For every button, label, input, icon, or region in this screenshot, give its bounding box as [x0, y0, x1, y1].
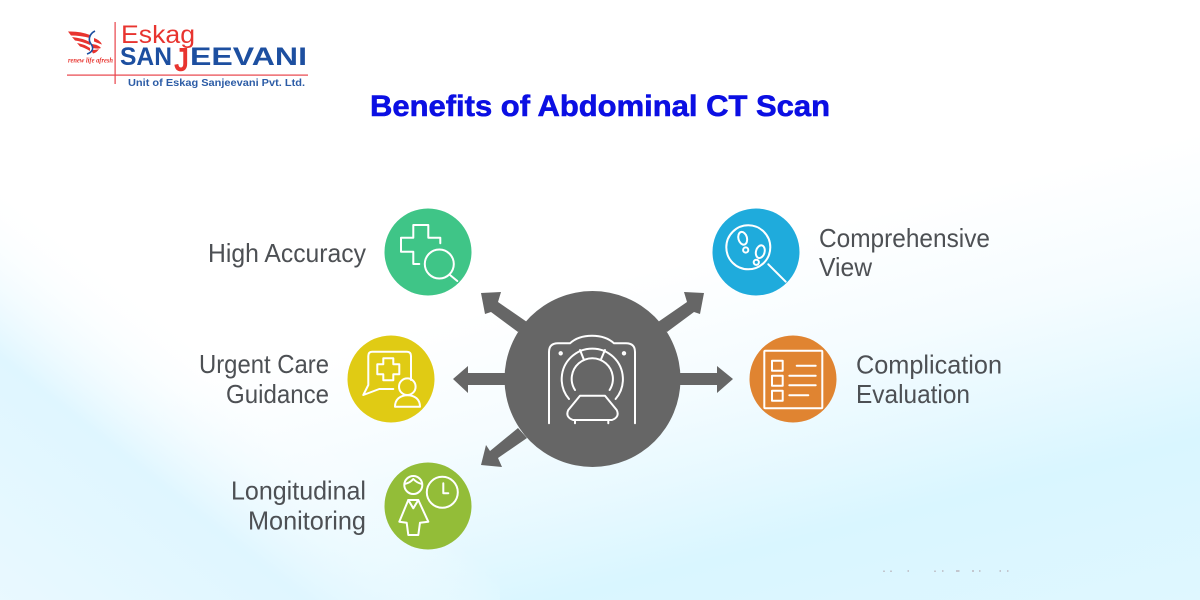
node: Complication Evaluation [750, 336, 1002, 422]
logo vertical rule [114, 22, 116, 84]
icon: medical cross with magnifier [401, 225, 457, 281]
icon: magnifier over footprints [726, 225, 786, 282]
icon: checklist [764, 351, 822, 408]
label line 2: View [819, 252, 872, 282]
arrow: right [675, 366, 733, 393]
logo letter J: J [174, 41, 189, 78]
lime circle [384, 462, 472, 550]
icon: CT scanner [549, 336, 635, 423]
node: Longitudinal Monitoring [231, 462, 472, 550]
faint marks near the bottom edge [883, 570, 1008, 572]
logo word Eevani: EEVANI [190, 43, 307, 71]
node: Urgent Care Guidance [199, 336, 434, 422]
green circle [384, 208, 472, 296]
logo word San: SAN [120, 43, 172, 71]
logo tagline: renew life afresh [68, 56, 113, 64]
arrow: upper right [658, 292, 704, 332]
orange circle [750, 336, 836, 422]
logo word Eskag: Eskag [121, 21, 195, 49]
icon: person with clock [399, 476, 458, 535]
logo emblem: red wings and blue S [68, 31, 102, 54]
yellow circle [348, 336, 434, 422]
logo: Eskag Sanjeevani [67, 21, 308, 89]
central hub with arrows [453, 291, 733, 467]
blue circle [712, 208, 800, 296]
logo horizontal rule [67, 74, 308, 76]
label: Comprehensive [819, 223, 990, 253]
arrow: upper left [481, 292, 527, 332]
label line 2: Guidance [226, 379, 329, 409]
label: Urgent Care [199, 349, 329, 379]
title: Benefits of Abdominal CT Scan [370, 90, 830, 123]
label line 2: Evaluation [856, 379, 970, 409]
node: Comprehensive View [712, 208, 990, 296]
label: Longitudinal [231, 476, 366, 506]
hub circle [504, 291, 680, 467]
label line 2: Monitoring [248, 506, 366, 536]
label: Complication [856, 350, 1002, 380]
arrow: lower left [481, 428, 527, 467]
label: High Accuracy [208, 238, 366, 268]
icon: chat bubble with cross and person [363, 352, 420, 407]
node: High Accuracy [208, 208, 472, 296]
logo subtitle: Unit of Eskag Sanjeevani Pvt. Ltd. [128, 78, 305, 89]
arrow: left [453, 366, 510, 393]
